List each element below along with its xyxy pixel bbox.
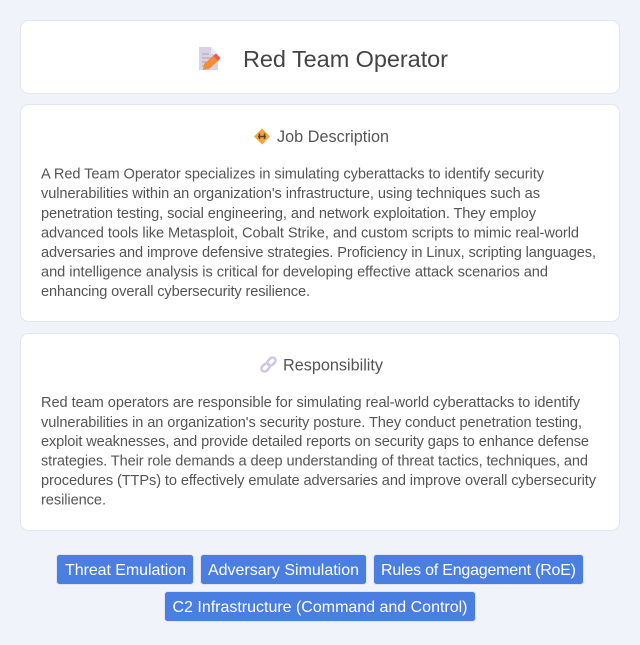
icon: chain link: [260, 356, 277, 373]
tag: adversary simulation: [200, 554, 366, 584]
text block: responsibility: [41, 395, 597, 508]
panel: responsibility: [20, 334, 620, 530]
text block: responsibility: procedures (TTPs) to effectively emulate adversaries and improve overall cybersecurity: [41, 473, 597, 489]
text block: job description: adversaries and improve defensive strategies. Proficiency in Linux, scripting languages,: [41, 245, 596, 261]
panel: job description: [20, 104, 620, 322]
text block: job description: vulnerabilities within an organization's infrastructure, using techniques such as: [41, 186, 540, 202]
title: Red Team Operator: [243, 46, 448, 72]
text block: responsibility: vulnerabilities in an organization's security posture. They conduct penetration testing,: [41, 415, 582, 431]
tag: adversary simulation: Adversary Simulation: [208, 562, 359, 579]
text block: responsibility: exploit weaknesses, and provide detailed reports on security gaps to enhance defense: [41, 434, 589, 450]
tag: c2 infrastructure: [164, 592, 476, 622]
text block: responsibility: strategies. Their role demands a deep understanding of threat tactics, techniques, and: [41, 454, 588, 470]
tag: rules of engagement: [374, 554, 584, 584]
text block: job description: advanced tools like Metasploit, Cobalt Strike, and custom scripts to mimic real-world: [41, 226, 579, 242]
text block: job description: and intelligence analysis is critical for developing effective attack scenarios and: [41, 264, 548, 280]
heading: job description: Job Description: [277, 128, 389, 146]
panel: header: [20, 20, 620, 94]
tag: c2 infrastructure: C2 Infrastructure (Command and Control): [172, 599, 468, 616]
icon: document with pencil: [199, 47, 220, 70]
heading: responsibility: Responsibility: [283, 356, 384, 374]
tag: threat emulation: Threat Emulation: [65, 562, 186, 579]
tag: rules of engagement: Rules of Engagement (RoE): [381, 562, 576, 579]
text block: responsibility: Red team operators are responsible for simulating real-world cyberattacks to identify: [41, 395, 581, 411]
text block: job description: A Red Team Operator specializes in simulating cyberattacks to identify security: [41, 166, 545, 182]
tag: threat emulation: [56, 554, 194, 584]
text block: responsibility: resilience.: [41, 492, 106, 508]
text block: job description: [41, 166, 596, 300]
text block: job description: enhancing overall cybersecurity resilience.: [41, 284, 310, 300]
icon: warning diamond: [254, 128, 270, 144]
text block: job description: penetration testing, social engineering, and network exploitation. They employ: [41, 206, 537, 222]
